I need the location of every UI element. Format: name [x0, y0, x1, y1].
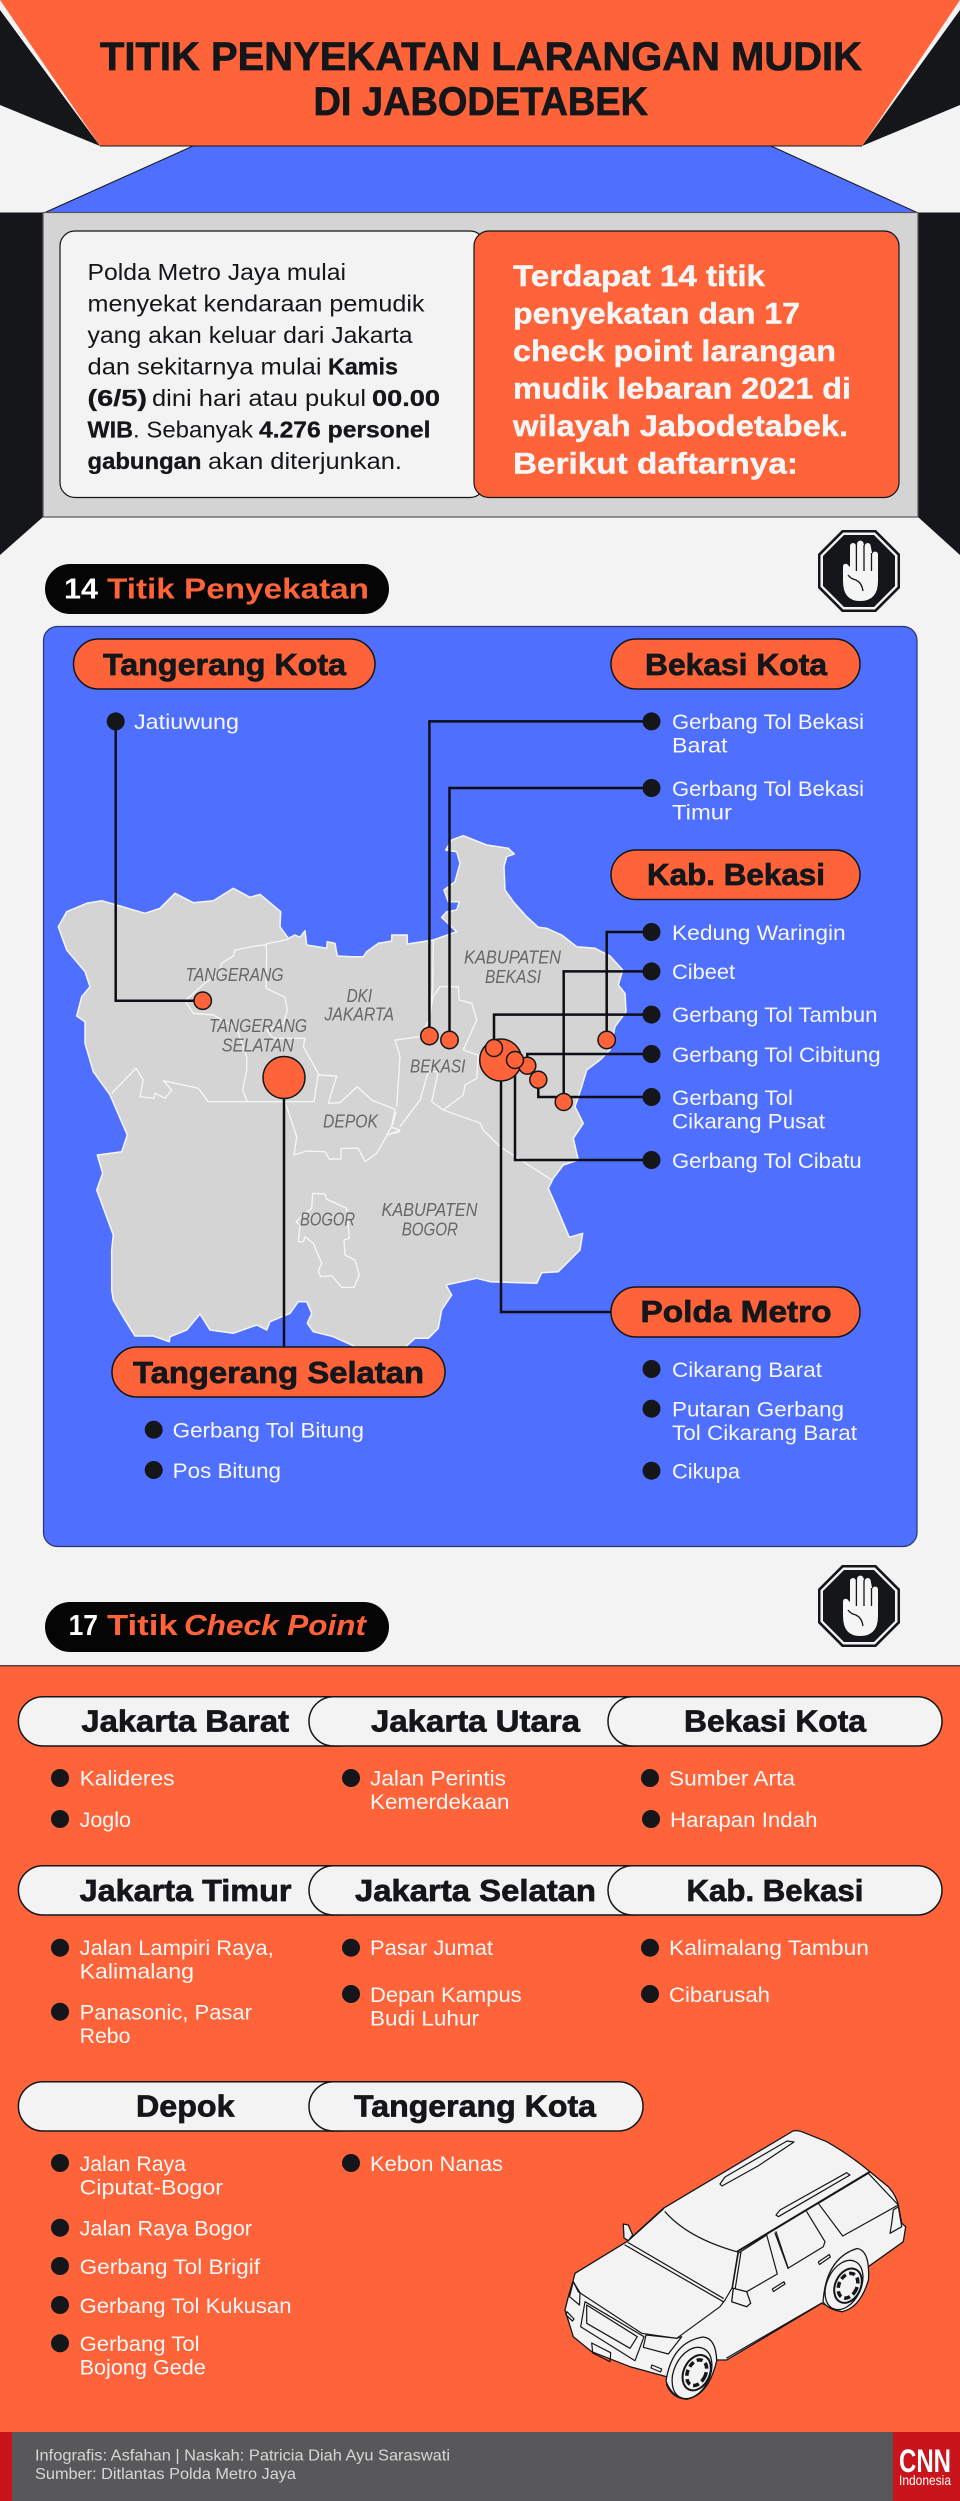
- list: Jakarta Selatan: [342, 1937, 522, 2030]
- intro text block: 4.276 personel: [259, 416, 430, 442]
- icon: stop hand: [818, 1565, 900, 1647]
- highlight text: penyekatan dan 17: [513, 298, 800, 330]
- front wheel: [664, 2341, 720, 2405]
- section heading: 17 titik check point: [45, 1602, 389, 1652]
- group: Kab. Bekasi: Cikarang Pusat: [672, 1110, 825, 1134]
- section heading: 14 titik penyekatan: [45, 564, 389, 614]
- list: Jakarta Barat: [51, 1768, 174, 1832]
- group: Bekasi Kota: Gerbang Tol Bekasi: [672, 711, 864, 734]
- intro text block: dini hari atau pukul: [152, 385, 366, 411]
- group: Tangerang Kota: Jatiuwung: [134, 711, 239, 734]
- highlight text: check point larangan: [513, 335, 836, 368]
- header row 1: Bekasi Kota: [684, 1704, 867, 1739]
- group: Tangerang Selatan: Pos Bitung: [173, 1460, 281, 1483]
- list: Jakarta Utara: Kemerdekaan: [370, 1791, 510, 1814]
- header row 1: Jakarta Barat: [81, 1704, 289, 1739]
- list: Jakarta Utara: [342, 1768, 510, 1814]
- blue trapezoid: [45, 146, 917, 212]
- list: Depok: Gerbang Tol Brigif: [80, 2256, 260, 2279]
- list: Bekasi Kota: [641, 1768, 818, 1832]
- header row 1: [18, 1697, 942, 1746]
- header row 2: Kab. Bekasi: [686, 1873, 863, 1908]
- highlight text: mudik lebaran 2021 di: [513, 372, 851, 406]
- intro text block: 00.00: [372, 385, 440, 411]
- highlight text: Terdapat 14 titik: [513, 260, 765, 293]
- map labels: TANGERANG: [209, 1016, 307, 1036]
- group: Kab. Bekasi: Gerbang Tol Cibatu: [672, 1150, 862, 1173]
- group: Kab. Bekasi: Gerbang Tol: [672, 1087, 793, 1110]
- list: Bekasi Kota: Harapan Indah: [670, 1809, 818, 1832]
- header row 1: Jakarta Utara: [371, 1704, 581, 1739]
- credits: Infografis: Asfahan | Naskah: Patricia Diah Ayu Saraswati: [35, 2448, 450, 2465]
- map labels: BEKASI: [485, 967, 541, 987]
- group: Kab. Bekasi: Kab. Bekasi: [647, 857, 825, 892]
- group: Bekasi Kota: [611, 639, 864, 824]
- logo: CNN Indonesia: Indonesia: [899, 2472, 951, 2488]
- group: Polda Metro: Putaran Gerbang: [672, 1398, 844, 1422]
- list: Depok: Gerbang Tol: [80, 2333, 200, 2356]
- credits: Sumber: Ditlantas Polda Metro Jaya: [35, 2466, 296, 2483]
- group: Bekasi Kota: Barat: [672, 734, 728, 758]
- group: Kab. Bekasi: Gerbang Tol Tambun: [672, 1004, 878, 1027]
- group: Polda Metro: Polda Metro: [640, 1294, 832, 1329]
- map markers: [194, 992, 615, 1110]
- intro text block: menyekat kendaraan pemudik: [88, 290, 425, 316]
- group: Tangerang Selatan: Tangerang Selatan: [133, 1355, 424, 1390]
- title: TITIK PENYEKATAN LARANGAN MUDIK: [100, 35, 862, 79]
- section heading: 14 titik penyekatan: Titik Penyekatan: [107, 574, 369, 606]
- list: Jakarta Timur: Jalan Lampiri Raya,: [80, 1937, 274, 1960]
- map labels: DKI: [347, 986, 372, 1006]
- map labels: [186, 948, 562, 1240]
- group: Bekasi Kota: Bekasi Kota: [645, 647, 828, 682]
- list: Jakarta Barat: Joglo: [80, 1809, 131, 1832]
- intro text block: [88, 259, 440, 474]
- list: Depok: Bojong Gede: [80, 2356, 206, 2380]
- group: Tangerang Kota: [74, 639, 375, 734]
- header banner: [0, 0, 960, 146]
- intro text block: (6/5): [88, 385, 147, 411]
- highlight text: [512, 260, 851, 480]
- list: Jakarta Selatan: Pasar Jumat: [370, 1937, 493, 1960]
- map labels: BEKASI: [410, 1056, 465, 1076]
- map labels: DEPOK: [323, 1112, 379, 1132]
- group: Tangerang Kota: Tangerang Kota: [103, 647, 347, 682]
- section heading: 14 titik penyekatan: 14: [64, 574, 98, 606]
- title: [100, 35, 862, 124]
- list: Depok: Jalan Raya Bogor: [80, 2218, 252, 2240]
- intro text block: . Sebanyak: [133, 416, 254, 442]
- list: Jakarta Selatan: Depan Kampus: [370, 1984, 522, 2007]
- list: Kab. Bekasi: Kalimalang Tambun: [669, 1937, 869, 1960]
- map labels: BOGOR: [402, 1220, 458, 1240]
- header row 3: Depok: [136, 2089, 235, 2124]
- header row 3: [18, 2082, 643, 2131]
- panel: intro: [43, 212, 918, 517]
- intro text block: Polda Metro Jaya mulai: [88, 259, 346, 285]
- list: Jakarta Barat: Kalideres: [80, 1768, 174, 1791]
- intro text block: yang akan keluar dari Jakarta: [88, 322, 413, 348]
- list: Jakarta Selatan: Budi Luhur: [370, 2008, 479, 2030]
- map of Jabodetabek: [58, 836, 626, 1347]
- list: Jakarta Timur: Kalimalang: [80, 1960, 194, 1984]
- title: DI JABODETABEK: [314, 80, 648, 124]
- map labels: BOGOR: [300, 1210, 355, 1230]
- list: Jakarta Timur: [51, 1937, 274, 2048]
- map labels: KABUPATEN: [464, 948, 562, 968]
- group: Bekasi Kota: Gerbang Tol Bekasi: [672, 778, 864, 801]
- intro text block: Kamis: [328, 354, 398, 380]
- intro text block: WIB: [88, 416, 133, 442]
- group: Polda Metro: Tol Cikarang Barat: [672, 1422, 857, 1445]
- highlight text: Berikut daftarnya:: [513, 448, 798, 480]
- highlight text: wilayah Jabodetabek.: [512, 410, 848, 443]
- group: Kab. Bekasi: Kedung Waringin: [672, 922, 846, 945]
- group: Polda Metro: Cikupa: [672, 1460, 740, 1484]
- list: Depok: Ciputat-Bogor: [80, 2176, 223, 2200]
- list: Jakarta Timur: Panasonic, Pasar: [80, 2002, 252, 2024]
- icon: stop hand: [818, 530, 900, 612]
- group: Polda Metro: Cikarang Barat: [672, 1359, 822, 1382]
- map labels: KABUPATEN: [382, 1200, 478, 1220]
- section heading: 17 titik check point: 17: [69, 1610, 98, 1642]
- header row 2: [18, 1866, 942, 1915]
- map labels: JAKARTA: [324, 1005, 394, 1025]
- list: Jakarta Timur: Rebo: [80, 2025, 130, 2048]
- header row 2: Jakarta Timur: [80, 1873, 291, 1908]
- panel: 14 titik penyekatan: [44, 626, 917, 1546]
- list: Depok: Jalan Raya: [80, 2153, 186, 2176]
- list: Depok: [51, 2153, 292, 2380]
- connector lines: [116, 721, 651, 1347]
- header row 2: Jakarta Selatan: [355, 1873, 596, 1908]
- group: Kab. Bekasi: Gerbang Tol Cibitung: [672, 1044, 881, 1067]
- list: Jakarta Utara: Jalan Perintis: [370, 1768, 506, 1791]
- map labels: SELATAN: [222, 1035, 295, 1055]
- credits: [35, 2448, 450, 2483]
- panel: 17 titik check point: [0, 1666, 960, 2433]
- header row 3: Tangerang Kota: [354, 2089, 597, 2124]
- section heading: 17 titik check point: Titik: [107, 1610, 179, 1642]
- group: Tangerang Selatan: [112, 1347, 445, 1483]
- list: Bekasi Kota: Sumber Arta: [669, 1768, 795, 1791]
- group: Polda Metro: [611, 1287, 860, 1484]
- illustration: car: [565, 2131, 906, 2405]
- group: Kab. Bekasi: [611, 850, 881, 1173]
- group: Bekasi Kota: Timur: [672, 802, 732, 824]
- list: Kab. Bekasi: Cibarusah: [669, 1984, 770, 2007]
- list: Kab. Bekasi: [641, 1937, 869, 2007]
- intro text block: akan diterjunkan.: [208, 448, 402, 474]
- section heading: 17 titik check point: Check Point: [184, 1610, 367, 1642]
- list: Tangerang Kota: Kebon Nanas: [370, 2153, 503, 2176]
- group: Kab. Bekasi: Cibeet: [672, 961, 735, 984]
- intro text block: dan sekitarnya mulai: [88, 354, 322, 380]
- footer: [0, 2432, 960, 2501]
- black side bands: [0, 212, 960, 555]
- map labels: TANGERANG: [186, 965, 284, 985]
- list: Depok: Gerbang Tol Kukusan: [80, 2295, 291, 2318]
- rear wheel: [818, 2254, 870, 2316]
- group: Tangerang Selatan: Gerbang Tol Bitung: [173, 1420, 364, 1442]
- intro text block: gabungan: [88, 448, 202, 474]
